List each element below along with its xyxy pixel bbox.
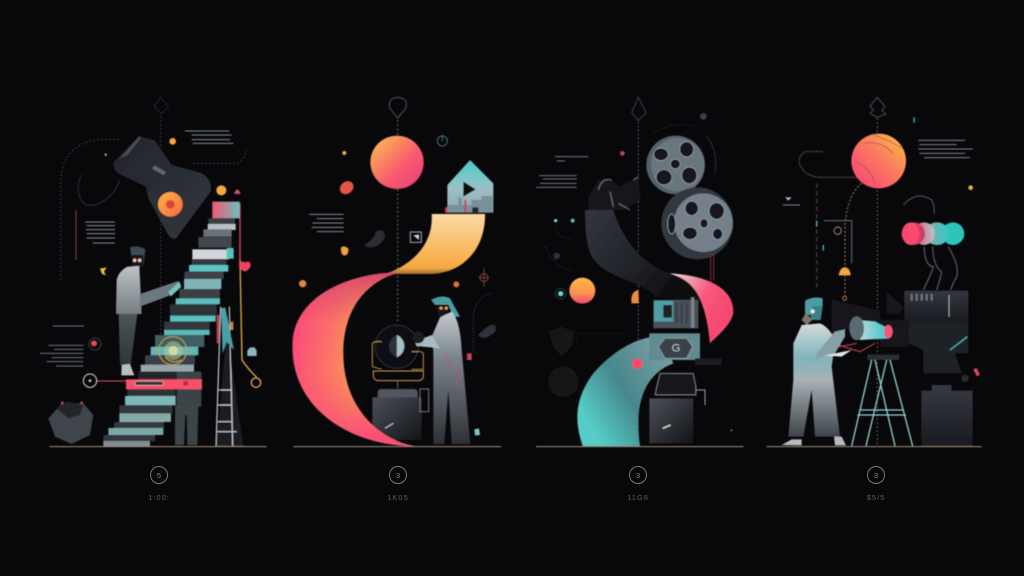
small planets and dots	[299, 151, 459, 287]
text lines lower left	[40, 326, 84, 366]
baseline	[293, 445, 501, 448]
ribbon: pink	[670, 273, 733, 343]
spotlight	[114, 136, 211, 239]
text lines	[309, 214, 344, 232]
house with play icon	[445, 160, 493, 213]
step marker two: 1K05	[387, 493, 409, 502]
decorative dashed arcs	[545, 124, 716, 347]
planet	[851, 134, 906, 188]
planet	[569, 278, 595, 304]
icon: top diamond	[632, 97, 646, 121]
teal marks	[817, 117, 914, 251]
baseline	[536, 445, 743, 448]
pink dot	[632, 358, 643, 369]
icon: top diamond	[154, 97, 168, 114]
faceted rock	[48, 401, 93, 444]
panel: stage three, film reels and ribbon	[536, 97, 743, 447]
headphone frame	[824, 221, 852, 263]
tripod	[852, 357, 913, 446]
small dots	[554, 113, 732, 431]
compass sparkle	[478, 268, 489, 287]
text lines	[536, 157, 588, 187]
glowing circular hologram	[159, 337, 187, 365]
red vertical line	[74, 210, 77, 260]
pink control bar	[97, 379, 202, 389]
step marker three: 3	[636, 471, 640, 480]
small text mark left	[783, 197, 800, 205]
text lines top right	[185, 131, 233, 143]
small teal box icon	[247, 347, 257, 356]
step marker two: 3	[396, 471, 400, 480]
person with laptop	[116, 247, 181, 375]
icon: dial	[83, 374, 97, 387]
dotted guide lines	[799, 118, 934, 445]
dial panel	[649, 333, 700, 360]
dark blob	[364, 230, 385, 247]
baseline	[767, 445, 982, 448]
reel machine outlined in gold	[372, 325, 423, 388]
second figure below stairs	[175, 372, 201, 445]
step marker one: 5	[157, 471, 161, 480]
dotted guide lines	[61, 117, 247, 423]
panel: stage four, camera operator	[767, 97, 982, 447]
step marker four	[867, 466, 885, 502]
large camera machine	[904, 291, 980, 446]
dial panel: G	[672, 342, 680, 354]
orange dome	[839, 267, 851, 300]
planet	[370, 136, 424, 189]
dark silhouettes left	[548, 327, 579, 397]
dotted guide line	[637, 122, 640, 437]
yellow sparkle icon	[100, 267, 107, 275]
camera operator	[782, 297, 852, 445]
step marker three: 11G8	[627, 493, 649, 502]
heart	[239, 261, 251, 272]
decorative orange dots	[104, 138, 241, 195]
step marker three	[627, 466, 649, 502]
small planets	[553, 253, 639, 303]
ladder	[216, 307, 243, 446]
ribbon: pink crescent	[292, 273, 414, 446]
base machine	[649, 373, 705, 443]
projector body	[653, 297, 698, 328]
small dark labels	[695, 358, 722, 365]
step marker four: $5/5	[867, 493, 885, 502]
yellow dot	[968, 185, 973, 190]
icon: power circle	[437, 135, 447, 146]
dotted guide line	[396, 120, 400, 323]
equipment case	[372, 389, 429, 440]
film reel: lower	[661, 187, 733, 259]
step marker two	[387, 466, 409, 502]
icon: balloon outline	[389, 97, 406, 118]
step marker four: 3	[874, 471, 878, 480]
icon: top ornament	[870, 97, 886, 117]
step marker one: 1:00:	[148, 493, 170, 502]
icon: small framed square	[410, 232, 421, 242]
ribbon: dark upper band	[585, 210, 700, 303]
camera head	[832, 292, 908, 352]
icon: red target	[89, 338, 101, 350]
pink and yellow cable	[240, 203, 261, 387]
ribbon: yellow upper band	[385, 214, 485, 274]
person at machine	[412, 297, 480, 444]
step marker one	[148, 466, 170, 502]
film reel: upper	[646, 136, 705, 194]
dashed arc and blob right	[473, 293, 496, 353]
colour pills	[902, 222, 964, 245]
text lines	[918, 140, 973, 158]
projector top silhouette	[588, 177, 641, 210]
panel: stage one, staircase and spotlight	[40, 97, 267, 447]
staircase	[103, 202, 240, 446]
panel: stage two, ribbon and planet	[292, 97, 501, 447]
thin outline circle	[78, 175, 119, 205]
baseline	[49, 445, 267, 448]
text lines left	[85, 222, 115, 243]
cables from pills	[923, 247, 957, 290]
figure on ladder	[217, 307, 234, 353]
film leader strands	[711, 253, 714, 283]
ribbon: teal lower band	[577, 337, 673, 446]
